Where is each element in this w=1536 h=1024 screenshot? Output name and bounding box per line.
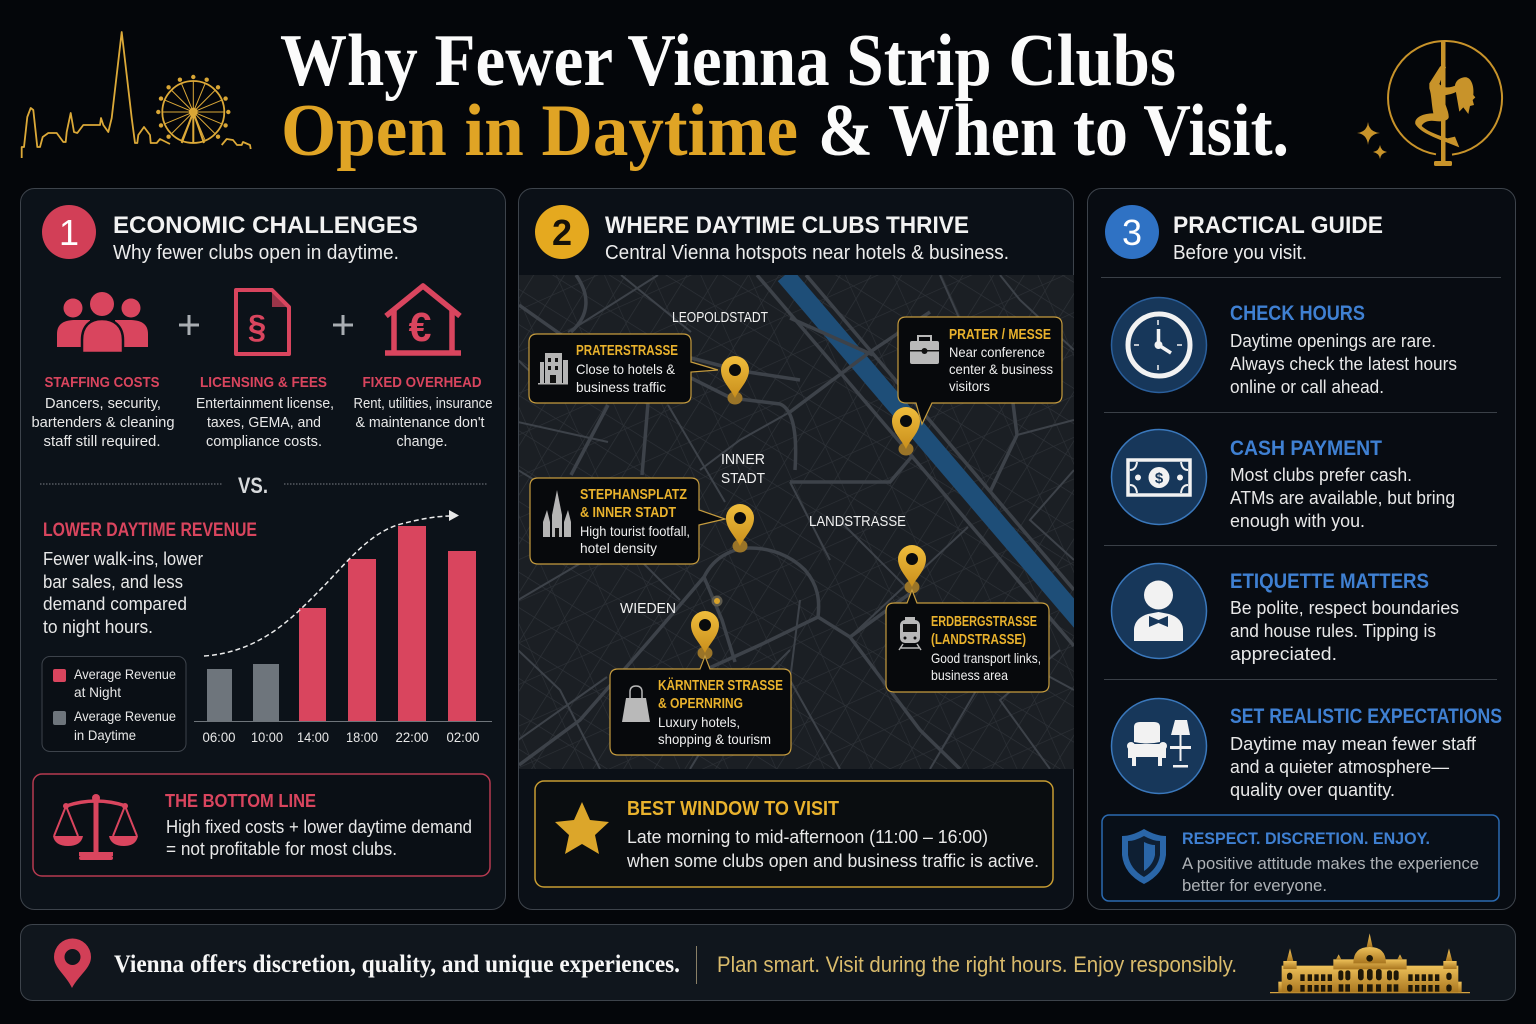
callout: Stephansplatz and Inner Stadt: STEPHANSPLATZ (580, 487, 687, 503)
heading: where daytime clubs thrive (605, 212, 1009, 264)
pin: Praterstrasse (721, 356, 749, 404)
text: cash payment: ATMs are available, but bring (1230, 488, 1455, 508)
footer message: Vienna offers discretion, quality, and unique experiences. (114, 951, 680, 978)
callout: Erdbergstrasse: business area (931, 667, 1008, 683)
heading: practical guide: PRACTICAL GUIDE (1173, 212, 1383, 239)
bar chart: 14:00 (297, 729, 329, 745)
number badge 1: 1 (59, 212, 79, 253)
callout: Prater Messe: PRATER / MESSE (949, 327, 1051, 343)
text: licensing and fees (196, 374, 334, 450)
text: licensing and fees: taxes, GEMA, and (207, 414, 321, 431)
bar chart: 22:00 (396, 729, 429, 745)
text: staffing costs (32, 374, 174, 450)
callout: Prater Messe: visitors (949, 378, 990, 394)
text: fixed overhead: FIXED OVERHEAD (362, 374, 482, 391)
callout: Erdbergstrasse (886, 590, 1049, 692)
text: cash payment: Most clubs prefer cash. (1230, 465, 1412, 485)
bar chart: 02:00 (446, 729, 480, 745)
text: lower daytime revenue: bar sales, and less (43, 572, 183, 592)
panel: economic challenges (20, 188, 506, 910)
panel: where daytime clubs thrive (518, 188, 1085, 910)
chart legend (42, 656, 186, 752)
callout: respect discretion enjoy (1102, 815, 1499, 901)
heading: practical guide (1173, 212, 1383, 264)
callout: best window to visit: Late morning to mid-afternoon (11:00 – 16:00) (627, 827, 988, 847)
icon: staff group (57, 292, 148, 353)
callout: Erdbergstrasse: (LANDSTRASSE) (931, 632, 1026, 648)
text: lower daytime revenue (43, 520, 257, 637)
number badge 3: 3 (1122, 212, 1142, 253)
text: set realistic expectations: quality over quantity. (1230, 780, 1395, 800)
icon: location pin (54, 939, 91, 988)
callout: the bottom line: THE BOTTOM LINE (165, 791, 316, 811)
text: staffing costs: bartenders & cleaning (32, 414, 174, 431)
callout: respect discretion enjoy: better for everyone. (1182, 876, 1327, 895)
callout: Prater Messe (898, 317, 1062, 424)
title: & When to Visit. (818, 90, 1289, 172)
text: staffing costs: Dancers, security, (45, 395, 161, 412)
number badge 2: 2 (552, 212, 572, 253)
text: check hours: Daytime openings are rare. (1230, 331, 1436, 351)
footer tagline: Plan smart. Visit during the right hours. Enjoy responsibly. (717, 952, 1237, 977)
text: set realistic expectations (1230, 705, 1502, 800)
heading: economic challenges: ECONOMIC CHALLENGES (113, 212, 418, 239)
callout: Praterstrasse (529, 334, 718, 403)
footer banner (20, 924, 1516, 1000)
icon: clock (1112, 298, 1206, 392)
heading: economic challenges: Why fewer clubs open in daytime. (113, 242, 399, 264)
map label: Inner Stadt: STADT (721, 470, 765, 487)
small location dot (712, 596, 722, 606)
bar chart: 18:00 (346, 729, 378, 745)
callout: the bottom line: = not profitable for most clubs. (166, 839, 397, 859)
pin: Stephansplatz (726, 504, 754, 552)
text: etiquette matters: and house rules. Tipping is (1230, 621, 1436, 641)
icon: plus (333, 315, 353, 335)
text: licensing and fees: LICENSING & FEES (200, 374, 327, 391)
bar chart (194, 510, 492, 745)
chart legend: in Daytime (74, 727, 136, 743)
map label: Inner Stadt (722, 454, 765, 483)
pin: Karntner Strasse (691, 611, 719, 660)
pin: Erdbergstrasse (898, 545, 926, 594)
number badge 1 (42, 205, 96, 259)
callout: Prater Messe: Near conference (949, 344, 1045, 360)
callout: Stephansplatz and Inner Stadt: & INNER STADT (580, 505, 676, 521)
text: cash payment (1230, 437, 1455, 531)
callout: best window to visit: BEST WINDOW TO VISIT (627, 798, 839, 820)
text: fixed overhead: change. (396, 433, 448, 450)
text: staffing costs: STAFFING COSTS (44, 374, 160, 391)
callout: the bottom line: High fixed costs + lower daytime demand (166, 817, 472, 837)
text: check hours: CHECK HOURS (1230, 302, 1365, 325)
title: Open in Daytime (281, 90, 798, 172)
versus divider: VS. (238, 473, 268, 498)
icon: licence document (236, 290, 289, 354)
text: lower daytime revenue: demand compared (43, 594, 187, 614)
chart legend: Average Revenue (74, 708, 176, 724)
callout: respect discretion enjoy: A positive attitude makes the experience (1182, 854, 1479, 873)
callout: Praterstrasse: PRATERSTRASSE (576, 343, 678, 359)
text: etiquette matters: Be polite, respect boundaries (1230, 598, 1459, 618)
callout: Karntner Strasse and Opernring: shopping & tourism (658, 731, 771, 747)
map label: Inner Stadt: INNER (721, 451, 765, 468)
map label: Leopoldstadt: LEOPOLDSTADT (672, 309, 768, 326)
map label: Wieden: WIEDEN (620, 600, 676, 617)
text: lower daytime revenue: Fewer walk-ins, lower (43, 549, 203, 569)
title (280, 20, 1289, 172)
pin: Prater Messe (892, 407, 920, 456)
text: lower daytime revenue: LOWER DAYTIME REVENUE (43, 520, 257, 541)
text: fixed overhead (354, 374, 492, 450)
panel: practical guide (1088, 188, 1516, 910)
text: licensing and fees: Entertainment license, (196, 395, 334, 412)
text: set realistic expectations: and a quieter atmosphere— (1230, 757, 1449, 777)
callout: Prater Messe: center & business (949, 361, 1053, 377)
text: etiquette matters: ETIQUETTE MATTERS (1230, 570, 1429, 593)
number badge 3 (1105, 205, 1159, 259)
callout: Erdbergstrasse: Good transport links, (931, 650, 1041, 666)
icon: Vienna skyline with ferris wheel (22, 32, 251, 158)
icon: cash banknote: $ (1155, 470, 1164, 487)
callout: Praterstrasse: business traffic (576, 379, 666, 395)
text: etiquette matters (1230, 570, 1459, 664)
chart legend: Average Revenue (74, 666, 176, 682)
icon: host with bow tie (1112, 564, 1206, 658)
callout: Karntner Strasse and Opernring: KÄRNTNER STRASSE (658, 677, 783, 694)
callout: Karntner Strasse and Opernring: Luxury hotels, (658, 714, 740, 730)
text: lower daytime revenue: to night hours. (43, 617, 153, 637)
callout: Stephansplatz and Inner Stadt: High tourist footfall, (580, 523, 690, 539)
text: fixed overhead: & maintenance don't (356, 414, 485, 431)
text: set realistic expectations: Daytime may mean fewer staff (1230, 734, 1477, 754)
heading: where daytime clubs thrive: Central Vienna hotspots near hotels & business. (605, 242, 1009, 264)
callout: Karntner Strasse and Opernring: & OPERNRING (658, 696, 743, 712)
callout: the bottom line (33, 774, 490, 876)
icon: plus (179, 315, 199, 335)
map of central Vienna (518, 275, 1085, 769)
callout: respect discretion enjoy: RESPECT. DISCRETION. ENJOY. (1182, 829, 1430, 848)
icon: house with euro (385, 286, 461, 353)
icon: pole dancer logo with sparkles (1357, 41, 1502, 166)
text: check hours: online or call ahead. (1230, 377, 1384, 397)
text: etiquette matters: appreciated. (1230, 644, 1337, 664)
icon: cash banknote (1112, 430, 1206, 524)
callout: Stephansplatz and Inner Stadt: hotel density (580, 540, 657, 556)
callout: Karntner Strasse and Opernring (610, 656, 791, 755)
callout: best window to visit: when some clubs open and business traffic is active. (626, 851, 1039, 871)
text: cash payment: enough with you. (1230, 511, 1365, 531)
callout: Erdbergstrasse: ERDBERGSTRASSE (931, 614, 1037, 630)
text: staffing costs: staff still required. (44, 433, 160, 450)
bar chart: 06:00 (202, 729, 236, 745)
icon: house with euro: € (409, 304, 432, 350)
text: check hours (1230, 302, 1457, 397)
heading: practical guide: Before you visit. (1173, 242, 1307, 264)
text: check hours: Always check the latest hours (1230, 354, 1457, 374)
callout: Praterstrasse: Close to hotels & (576, 361, 676, 377)
bar chart: 10:00 (251, 729, 283, 745)
icon: Viennese palace (1270, 933, 1470, 993)
map label: Landstrasse: LANDSTRASSE (809, 513, 906, 530)
text: fixed overhead: Rent, utilities, insurance (354, 395, 492, 412)
text: cash payment: CASH PAYMENT (1230, 437, 1382, 460)
icon: licence document: § (248, 308, 266, 345)
text: licensing and fees: compliance costs. (206, 433, 322, 450)
callout: best window to visit (535, 781, 1053, 887)
number badge 2 (535, 205, 589, 259)
heading: where daytime clubs thrive: WHERE DAYTIME CLUBS THRIVE (605, 212, 969, 239)
icon: armchair and lamp (1112, 698, 1206, 794)
chart legend: at Night (74, 684, 121, 700)
title: Why Fewer Vienna Strip Clubs (280, 20, 1176, 102)
heading: economic challenges (113, 212, 418, 264)
callout: Stephansplatz and Inner Stadt (530, 478, 725, 564)
